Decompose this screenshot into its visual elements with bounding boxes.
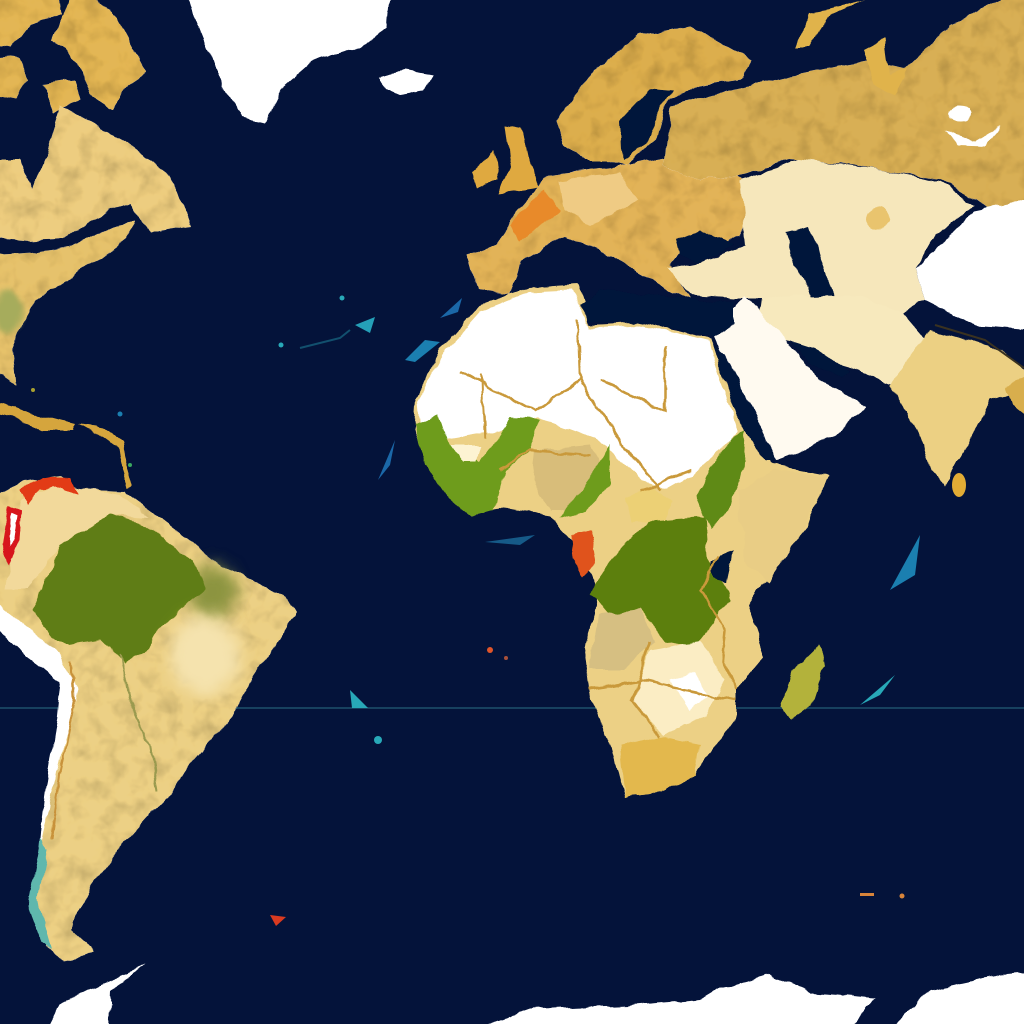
Iceland [378,70,433,94]
East Africa pale [738,470,828,582]
Congo basin [590,516,730,645]
Caspian Sea [785,226,838,312]
East Africa green [695,430,745,530]
Black Sea [676,230,735,262]
Himalaya ridge line [935,325,1024,368]
Central Africa green strip [560,445,610,518]
plains green patch [0,290,22,334]
North America [0,105,190,385]
Arctic Canada islands [0,0,146,112]
continent [0,476,295,962]
Caribbean and Central America [0,398,134,490]
Antarctica [40,965,1024,1024]
Madagascar [782,645,825,722]
Ireland [472,150,498,188]
Africa [414,285,830,798]
Iran and Pakistan [755,295,930,385]
Russia [664,0,1024,208]
Amazon basin [32,515,205,665]
Mainland Europe [468,150,760,300]
Siberia white flecks [942,108,1000,146]
Sahara white [418,290,738,488]
Central Asia [668,160,975,320]
Mongolia and Tibet white [915,196,1024,330]
Persian Gulf [790,340,850,378]
continent [414,285,830,798]
Red Venezuela coast [22,477,78,505]
British Isles [500,125,540,194]
Ocean island specks [31,296,920,926]
West Africa green [414,414,542,515]
Andes gold line [50,660,74,840]
Scandinavia and Finland [558,25,752,165]
South Africa gold [620,735,700,798]
central tan patch [532,445,600,510]
Sri Lanka [952,473,966,497]
Angola khaki [590,610,655,670]
northern pale highlands [5,485,150,590]
Europe [468,25,760,300]
Southern Chile teal [28,840,52,950]
Great Lakes dark [712,550,732,585]
Baltic sea [620,88,672,160]
Amazon fade east [188,564,236,620]
central Europe pale [560,172,640,225]
Canada [0,105,190,240]
Kazakh tan patch [866,207,890,229]
United States [0,222,136,385]
Red Colombia mark [2,505,22,565]
Colombia white centre [9,512,18,548]
Arctic island west [795,0,865,48]
Indochina edge [1006,370,1024,430]
Paraguay river line [120,655,158,790]
Arabia [712,296,865,462]
Arctic island east [862,38,908,95]
Mediterranean [580,290,735,338]
India [890,330,1024,485]
Western Europe orange [510,190,560,240]
Andes white strip [0,590,78,860]
Country borders [460,320,735,735]
central yellow patches [625,485,672,522]
Sahel pale notch [450,445,482,462]
Gabon red [570,530,596,576]
South America [0,476,295,962]
Greenland [180,0,392,123]
Red Sea [712,345,778,462]
Botswana white [670,672,708,712]
Pale central Brazil [170,615,240,695]
equator line [0,707,1024,709]
Southern Africa pale [632,640,725,735]
